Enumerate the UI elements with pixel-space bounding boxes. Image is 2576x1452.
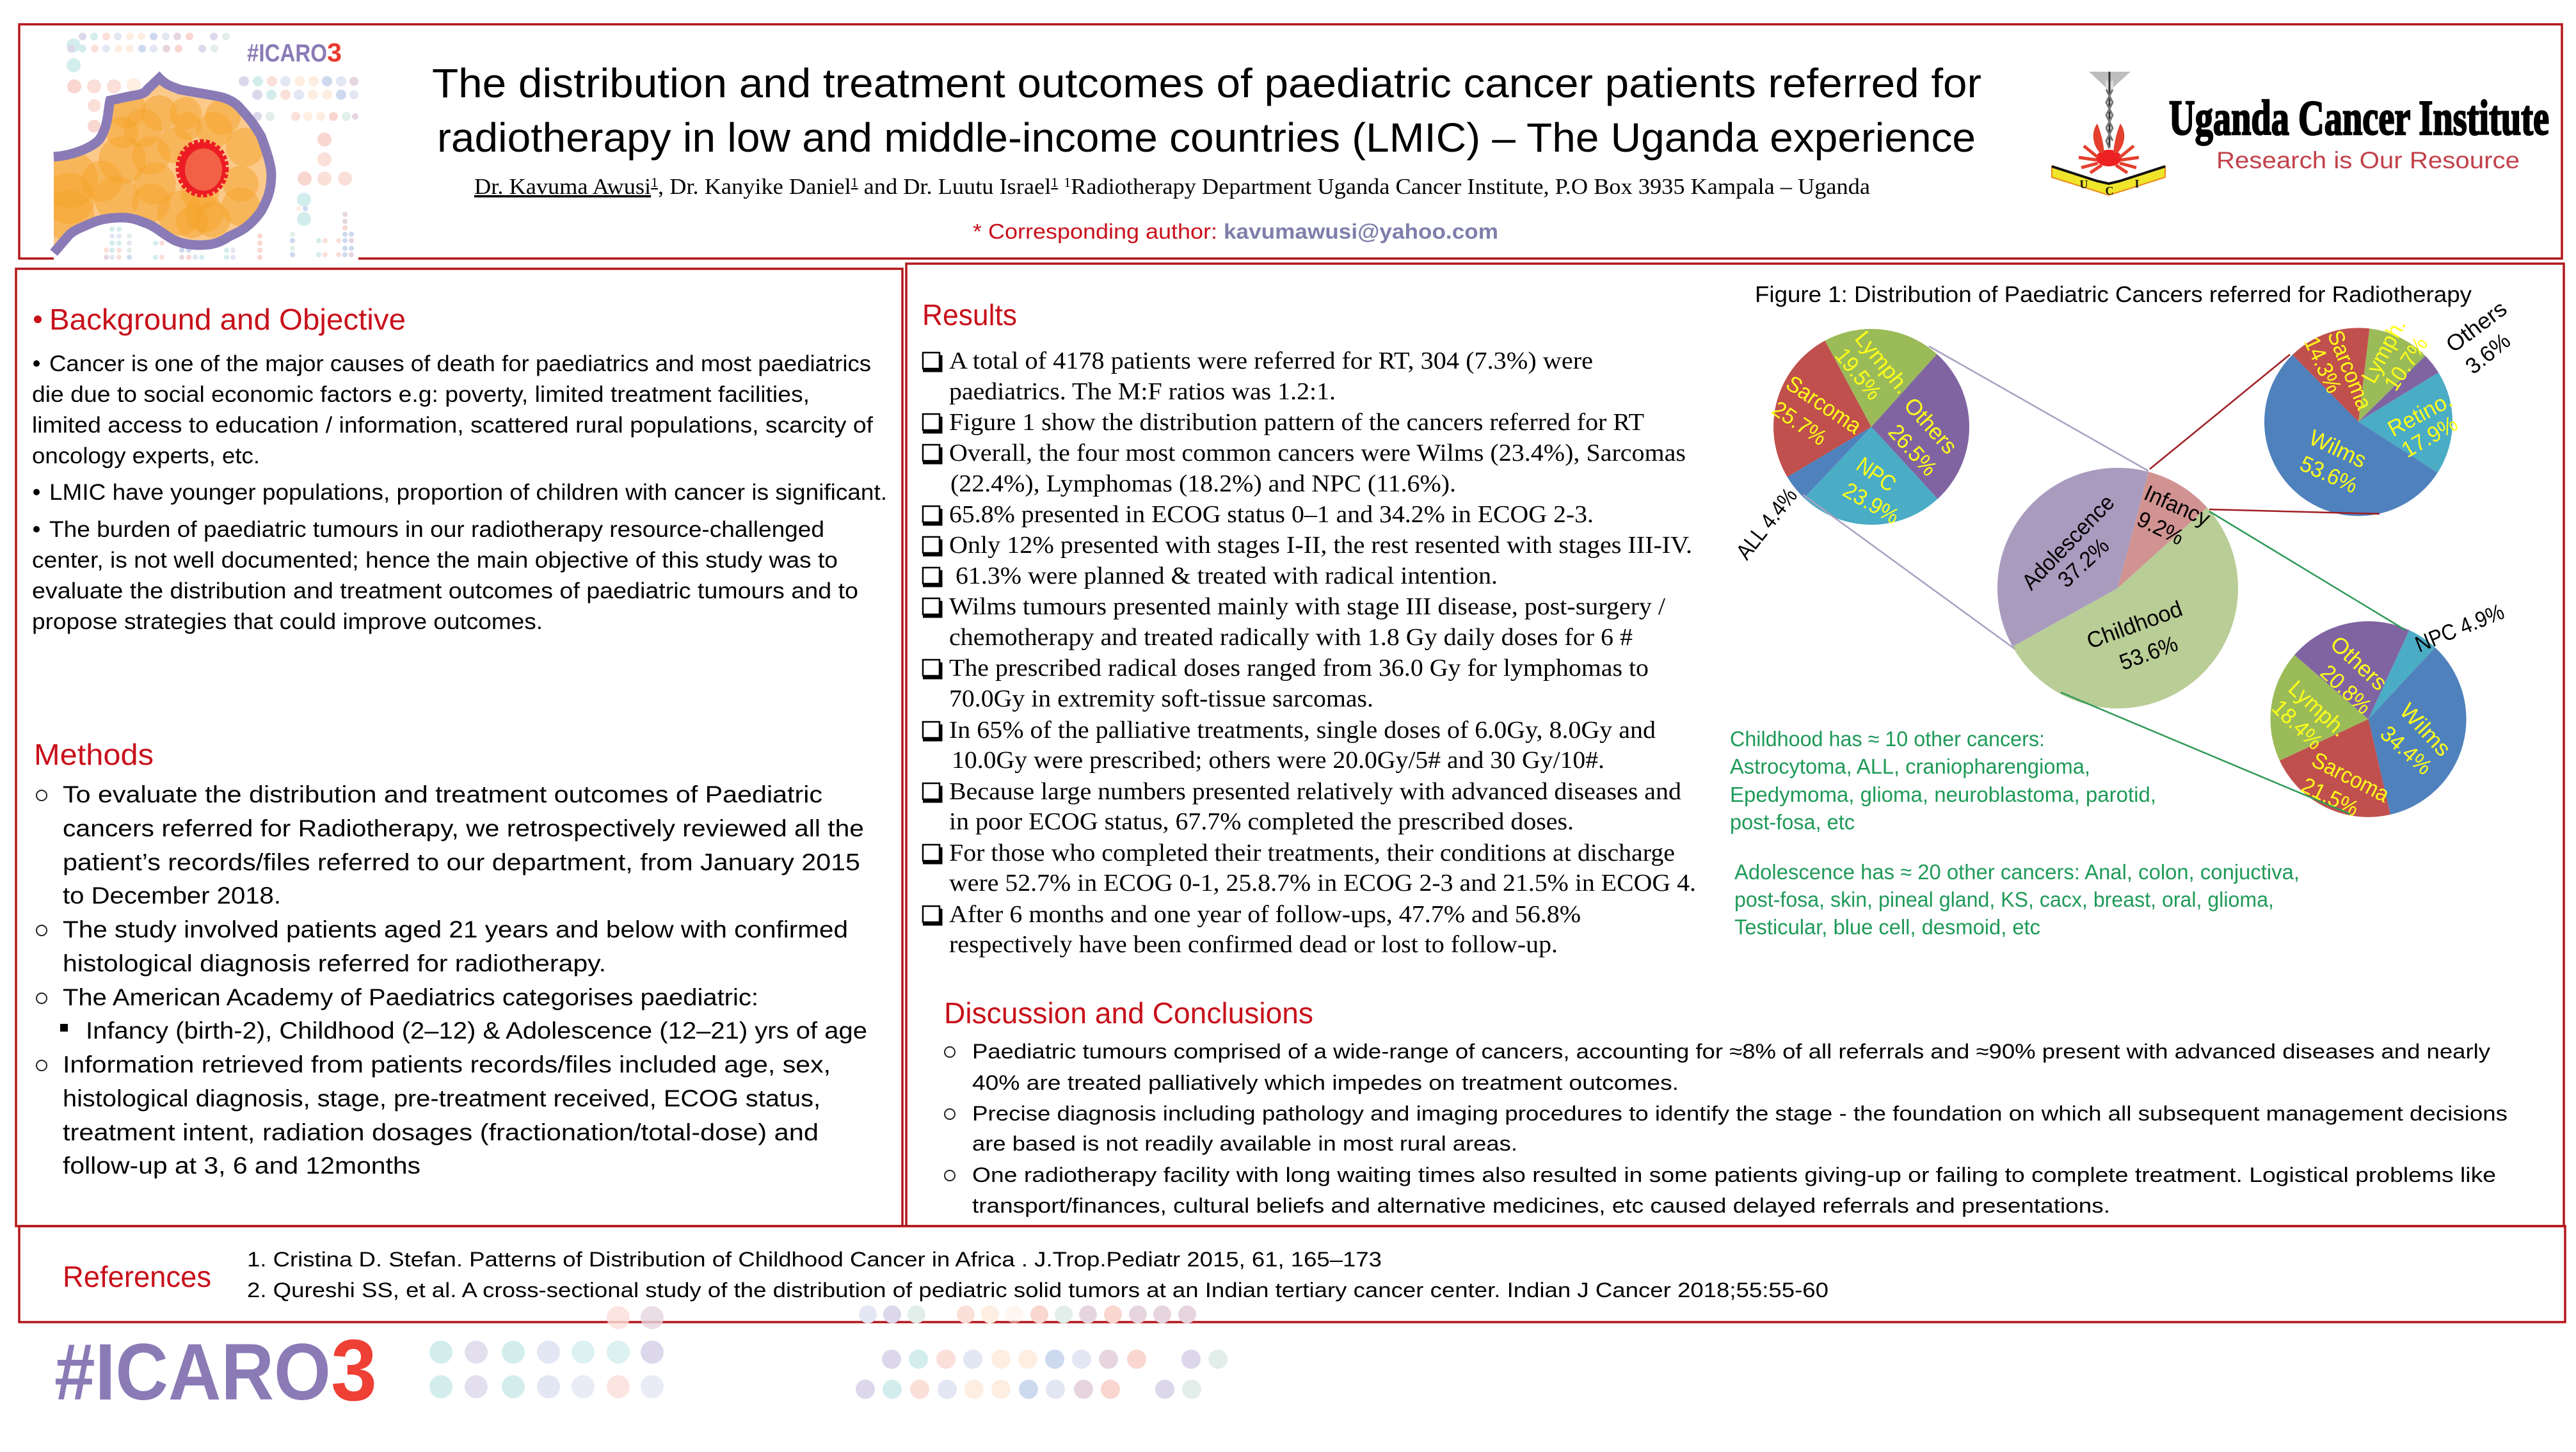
title <box>432 60 1981 161</box>
text block: results list: 65.8% presented in ECOG status 0–1 and 34.2% in ECOG 2-3. <box>949 501 1594 528</box>
text block: methods list: The American Academy of Paediatrics categorises paediatric: <box>63 984 758 1010</box>
pie: adolescence breakdown: Others <box>1899 393 1962 459</box>
callout: childhood other cancers: Astrocytoma, ALL, craniopharengioma, <box>1730 754 2090 778</box>
panel: methods <box>34 738 867 1179</box>
references panel frame <box>19 1226 2565 1322</box>
pie: childhood breakdown: Sarcoma <box>2308 747 2394 808</box>
text block: methods list <box>36 781 867 1179</box>
text block: results list <box>923 347 1696 958</box>
text block: background bullets: limited access to education / information, scattered rural populations, scarcity of <box>32 413 873 438</box>
text block: background bullets: evaluate the distribution and treatment outcomes of paediatric tumours and to <box>32 578 858 603</box>
pie: age group distribution: 37.2% <box>2053 533 2114 593</box>
text block: methods list: The study involved patients aged 21 years and below with confirmed <box>63 916 848 943</box>
pie: infancy breakdown: Sarcoma <box>2323 327 2377 413</box>
pie: childhood breakdown: Wilms <box>2395 698 2456 762</box>
header illustration: ICARO3 tumour artwork <box>40 29 358 261</box>
text block: results list: (22.4%), Lymphomas (18.2%) and NPC (11.6%). <box>950 470 1456 497</box>
text block: results list: were 52.7% in ECOG 0-1, 25.8.7% in ECOG 2-3 and 21.5% in ECOG 4. <box>949 870 1696 897</box>
pie: adolescence breakdown: 26.5% <box>1884 420 1942 481</box>
callout: adolescence other cancers: Testicular, blue cell, desmoid, etc <box>1734 915 2040 939</box>
icon: crab and staff emblem: C <box>2106 184 2113 197</box>
authors and affiliation: and Dr. Luutu Israel <box>858 174 1052 199</box>
authors and affiliation: 1 <box>651 175 658 190</box>
footer logo: #ICARO3: #ICARO <box>54 1328 331 1417</box>
heading: methods: Methods <box>34 738 154 771</box>
header illustration: ICARO3 tumour artwork: #ICARO <box>247 40 327 67</box>
pie: childhood breakdown: 34.4% <box>2376 721 2436 779</box>
panel: results <box>922 298 1696 958</box>
pie: infancy breakdown: Lymph. <box>2356 315 2411 387</box>
label: NPC 4.9%: NPC 4.9% <box>2412 599 2508 657</box>
pie: age group distribution: Infancy <box>2140 481 2214 532</box>
text block: results list: Only 12% presented with stages I-II, the rest resented with stages III-IV. <box>949 532 1692 559</box>
footer logo: #ICARO3: 3 <box>331 1321 377 1419</box>
text block: methods list: Information retrieved from patients records/files included age, sex, <box>63 1051 831 1078</box>
text block: results list: Because large numbers presented relatively with advanced diseases and <box>949 778 1681 805</box>
text block: methods list: histological diagnosis referred for radiotherapy. <box>63 950 606 977</box>
label: ALL 4.4%: ALL 4.4% <box>1731 483 1802 564</box>
header illustration: ICARO3 tumour artwork: 3 <box>327 38 342 67</box>
label: Others 3.6%: 3.6% <box>2461 328 2515 379</box>
callout: adolescence other cancers <box>1734 860 2300 939</box>
text block: results list: Figure 1 show the distribution pattern of the cancers referred for RT <box>949 409 1644 436</box>
panel: discussion and conclusions <box>944 996 2508 1217</box>
text block: results list: in poor ECOG status, 67.7% completed the prescribed doses. <box>949 808 1574 835</box>
pie: adolescence breakdown: Lymph. <box>1850 326 1915 399</box>
text block: discussion list: One radiotherapy facility with long waiting times also resulted in some patients giving-up or failing to complete treatment. Logistical problems like <box>972 1163 2496 1186</box>
chart: distribution of paediatric cancers pies <box>1731 296 2515 822</box>
text block: methods list: patient’s records/files referred to our department, from January 2015 <box>63 849 860 875</box>
header panel frame <box>19 24 2562 259</box>
heading: references: References <box>63 1260 211 1293</box>
text block: results list: 10.0Gy were prescribed; others were 20.0Gy/5# and 30 Gy/10#. <box>952 747 1604 774</box>
authors and affiliation: , Dr. Kanyike Daniel <box>658 174 851 199</box>
text block: discussion list <box>945 1040 2508 1217</box>
footer dot pattern: left group <box>429 1306 664 1398</box>
text block: background bullets: The burden of paediatric tumours in our radiotherapy resource-challenged <box>49 517 824 542</box>
icon: crab and staff emblem: U <box>2080 178 2088 191</box>
pie: adolescence breakdown: NPC <box>1852 452 1901 497</box>
authors and affiliation: Radiotherapy Department Uganda Cancer Institute, P.O Box 3935 Kampala – Uganda <box>1071 174 1870 199</box>
text block: discussion list: Precise diagnosis including pathology and imaging procedures to identify the stage - the foundation on which all subsequent management decisions <box>972 1102 2508 1125</box>
connector lines between pies <box>1803 346 2406 814</box>
text block: results list: chemotherapy and treated radically with 1.8 Gy daily doses for 6 # <box>949 624 1633 651</box>
pie: adolescence breakdown: 19.5% <box>1830 343 1887 404</box>
corresponding author <box>973 219 1498 243</box>
callout: adolescence other cancers: post-fosa, skin, pineal gland, KS, cacx, breast, oral, glioma, <box>1734 888 2274 911</box>
pie: age group distribution: Adolescence <box>2017 490 2120 594</box>
text block: results list: Overall, the four most common cancers were Wilms (23.4%), Sarcomas <box>949 440 1686 467</box>
figure title: Figure 1: Distribution of Paediatric Cancers referred for Radiotherapy <box>1755 282 2472 307</box>
text block: references list: 2. Qureshi SS, et al. A cross-sectional study of the distribution of pediatric solid tumors at an Indian tertiary cancer center. Indian J Cancer 2018;55:55-60 <box>247 1279 1828 1302</box>
logo: Uganda Cancer Institute <box>2052 72 2549 197</box>
callout: adolescence other cancers: Adolescence has ≈ 20 other cancers: Anal, colon, conjuctiva, <box>1734 860 2300 884</box>
title: The distribution and treatment outcomes of paediatric cancer patients referred for <box>432 60 1981 106</box>
pie: infancy breakdown: 10.7% <box>2380 332 2433 395</box>
callout: childhood other cancers <box>1730 727 2156 834</box>
icon: crab and staff emblem: I <box>2134 177 2140 190</box>
pie: infancy breakdown: 14.3% <box>2299 333 2346 397</box>
text block: results list: For those who completed their treatments, their conditions at discharge <box>949 840 1675 866</box>
callout: childhood other cancers: Epedymoma, glioma, neuroblastoma, parotid, <box>1730 783 2156 806</box>
text block: methods list: to December 2018. <box>63 882 281 909</box>
text block: results list: A total of 4178 patients were referred for RT, 304 (7.3%) were <box>949 347 1593 374</box>
text block: background bullets: die due to social economic factors e.g: poverty, limited treatment facilities, <box>32 382 810 407</box>
footer dot pattern: right group <box>856 1305 1228 1399</box>
pie: age group distribution: 53.6% <box>2116 631 2181 675</box>
text block: background bullets: propose strategies that could improve outcomes. <box>32 609 543 634</box>
panel: background and objective <box>32 303 887 634</box>
text block: background bullets <box>32 351 887 634</box>
left panel frame <box>16 269 902 1226</box>
pie: age group distribution: Childhood <box>2083 596 2186 654</box>
text block: results list: Wilms tumours presented mainly with stage III disease, post-surgery / <box>949 593 1665 620</box>
logo: Uganda Cancer Institute: Research is Our Resource <box>2216 147 2520 173</box>
text block: references list: 1. Cristina D. Stefan. Patterns of Distribution of Childhood Cancer in Africa . J.Trop.Pediatr 2015, 61, 165–173 <box>247 1248 1382 1271</box>
text block: discussion list: are based is not readily available in most rural areas. <box>972 1132 1517 1155</box>
pie: childhood breakdown: Lymph. <box>2284 676 2352 742</box>
text block: methods list: Infancy (birth-2), Childhood (2–12) & Adolescence (12–21) yrs of age <box>86 1017 867 1044</box>
authors and affiliation: 1 <box>851 175 858 190</box>
text block: methods list: histological diagnosis, stage, pre-treatment received, ECOG status, <box>63 1085 820 1112</box>
text block: methods list: treatment intent, radiation dosages (fractionation/total-dose) and <box>63 1119 819 1145</box>
heading: background and objective: Background and Objective <box>49 303 406 336</box>
pie: childhood breakdown: Others <box>2325 631 2392 696</box>
callout: childhood other cancers: Childhood has ≈ 10 other cancers: <box>1730 727 2045 751</box>
title: radiotherapy in low and middle-income countries (LMIC) – The Uganda experience <box>437 115 1976 161</box>
text block: discussion list: Paediatric tumours comprised of a wide-range of cancers, accounting for ≈8% of all referrals and ≈90% present with advanced diseases and nearly <box>972 1040 2491 1063</box>
pie: infancy breakdown: 53.6% <box>2296 451 2362 499</box>
pie: adolescence breakdown <box>1768 326 1969 529</box>
corresponding author: * Corresponding author: <box>973 219 1217 243</box>
text block: discussion list: transport/finances, cultural beliefs and alternative medicines, etc caused delayed referrals and presentations. <box>972 1194 2110 1217</box>
pie: childhood breakdown: 18.4% <box>2267 695 2328 754</box>
text block: results list: 61.3% were planned & treated with radical intention. <box>956 562 1498 589</box>
text block: background bullets: LMIC have younger populations, proportion of children with cancer is significant. <box>49 480 887 505</box>
heading: discussion and conclusions: Discussion and Conclusions <box>944 996 1313 1030</box>
callout: childhood other cancers: post-fosa, etc <box>1730 810 1855 834</box>
text block: methods list: To evaluate the distribution and treatment outcomes of Paediatric <box>63 781 822 808</box>
text block: discussion list: 40% are treated palliatively which impedes on treatment outcomes. <box>972 1071 1679 1094</box>
panel: references <box>63 1248 1828 1302</box>
text block: results list: 70.0Gy in extremity soft-tissue sarcomas. <box>949 685 1373 712</box>
text block: methods list: cancers referred for Radiotherapy, we retrospectively reviewed all the <box>63 815 864 842</box>
pie: adolescence breakdown: Sarcoma <box>1782 371 1866 439</box>
pie: infancy breakdown <box>2264 315 2462 516</box>
text block: results list: paediatrics. The M:F ratios was 1.2:1. <box>949 378 1336 405</box>
label: Others 3.6% <box>2442 296 2515 379</box>
text block: results list: The prescribed radical doses ranged from 36.0 Gy for lymphomas to <box>949 655 1649 682</box>
authors and affiliation: 1 <box>1064 175 1071 190</box>
text block: background bullets: center, is not well documented; hence the main objective of this study was to <box>32 548 838 573</box>
text block: results list: In 65% of the palliative treatments, single doses of 6.0Gy, 8.0Gy and <box>949 717 1656 744</box>
text block: results list: After 6 months and one year of follow-ups, 47.7% and 56.8% <box>949 901 1581 928</box>
text block: background bullets: Cancer is one of the major causes of death for paediatrics and most paediatrics <box>49 351 871 376</box>
authors and affiliation: 1 <box>1051 175 1058 190</box>
heading: results: Results <box>922 298 1017 331</box>
pie: adolescence breakdown: 23.9% <box>1839 477 1903 529</box>
authors and affiliation: Dr. Kavuma Awusi <box>474 174 651 199</box>
text block: references list <box>247 1248 1828 1302</box>
text block: results list: respectively have been confirmed dead or lost to follow-up. <box>949 931 1558 958</box>
icon: crab and staff emblem <box>2052 72 2165 197</box>
text block: background bullets: oncology experts, etc. <box>32 443 260 468</box>
pie: age group distribution <box>1997 468 2238 708</box>
pie: age group distribution: 9.2% <box>2133 506 2188 550</box>
pie: adolescence breakdown: 25.7% <box>1768 396 1831 451</box>
pie: childhood breakdown: 20.8% <box>2316 660 2376 719</box>
pie: infancy breakdown: 17.9% <box>2397 411 2462 463</box>
pie: infancy breakdown: Retino. <box>2384 387 2456 442</box>
text block: methods list: follow-up at 3, 6 and 12months <box>63 1153 420 1179</box>
corresponding author: kavumawusi@yahoo.com <box>1224 219 1498 243</box>
right panel frame <box>906 264 2564 1226</box>
label: Others 3.6%: Others <box>2442 296 2511 358</box>
pie: childhood breakdown <box>2267 621 2467 822</box>
pie: infancy breakdown: Wilms <box>2305 425 2371 473</box>
pie: childhood breakdown: 21.5% <box>2298 773 2362 822</box>
